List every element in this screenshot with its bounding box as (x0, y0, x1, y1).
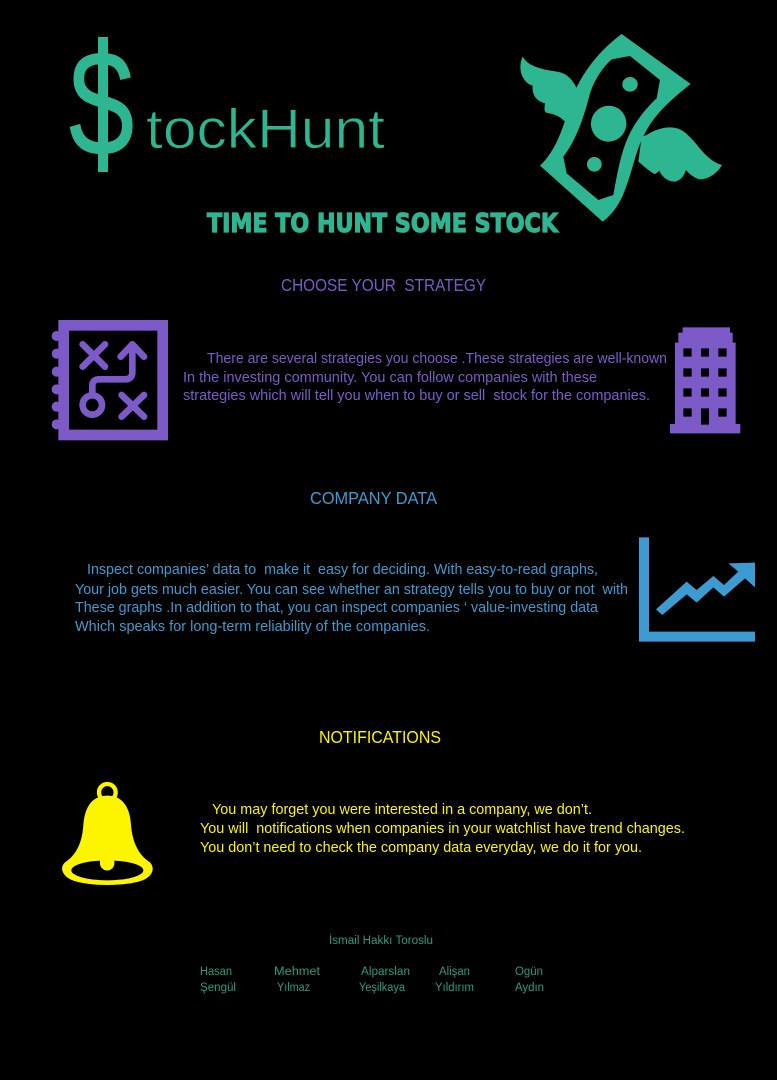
icon: rising line chart (639, 537, 755, 642)
icon: office building (670, 327, 740, 433)
team credits: İsmail Hakkı Toroslu (329, 934, 433, 947)
text: strategy description (183, 351, 667, 404)
text: company data description: Which speaks for long-term reliability of the companies. (75, 619, 430, 635)
icon: bell (62, 784, 153, 885)
text: notifications description (200, 802, 685, 856)
logo title: StockHunt (69, 19, 385, 187)
text: strategy description: In the investing community. You can follow companies with these (183, 370, 597, 386)
team credits: Hasan (200, 966, 232, 978)
team credits: Yılmaz (277, 982, 310, 994)
team credits: Şengül (200, 982, 236, 994)
team credits: Mehmet (274, 966, 321, 978)
heading: company data: COMPANY DATA (310, 488, 437, 508)
heading: choose your strategy: CHOOSE YOUR STRATEGY (281, 275, 486, 295)
heading: notifications: NOTIFICATIONS (319, 727, 441, 747)
text: company data description: Your job gets much easier. You can see whether an strategy tells you to buy or not with (75, 582, 628, 598)
icon: strategy playbook (52, 325, 163, 435)
text: strategy description: There are several strategies you choose .These strategies are well-known (207, 351, 667, 367)
logo title: StockHunt: $ (69, 19, 134, 187)
team credits: Ogün (515, 966, 543, 978)
tagline: TIME TO HUNT SOME STOCK (207, 209, 559, 239)
text: strategy description: strategies which will tell you when to buy or sell stock for the companies. (183, 388, 650, 404)
logo title: StockHunt: tockHunt (146, 97, 385, 160)
text: notifications description: You will notifications when companies in your watchlist have trend changes. (200, 821, 685, 837)
icon: flying money bill with wings (520, 34, 722, 222)
team credits: Alparslan (361, 966, 410, 978)
text: notifications description: You don’t need to check the company data everyday, we do it for you. (200, 840, 642, 856)
text: company data description: These graphs .In addition to that, you can inspect companies ‘ value-investing data (75, 600, 599, 616)
team credits: Aydın (515, 982, 544, 994)
team credits (200, 934, 544, 994)
text: company data description: Inspect companies’ data to make it easy for deciding. With easy-to-read graphs, (87, 562, 598, 578)
text: company data description (75, 562, 628, 635)
text: notifications description: You may forget you were interested in a company, we don’t. (212, 802, 592, 818)
team credits: Alişan (439, 966, 470, 978)
team credits: Yeşilkaya (359, 982, 406, 994)
team credits: Yıldırım (435, 982, 474, 994)
